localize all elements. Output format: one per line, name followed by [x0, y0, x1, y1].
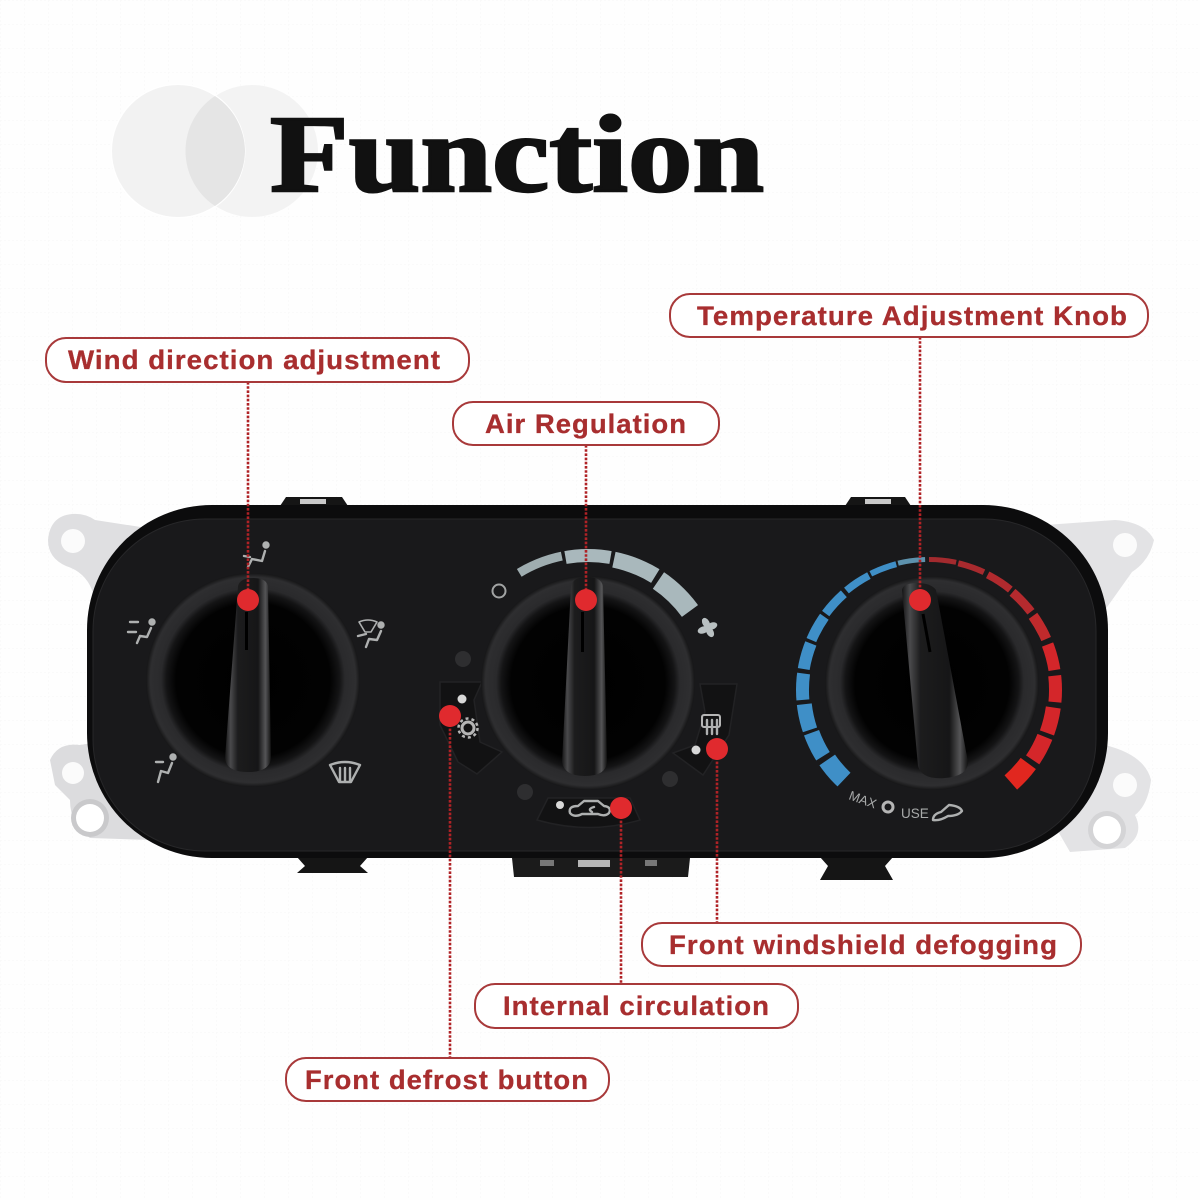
callout: wind direction adjustment: Wind direction adjustment [68, 345, 441, 375]
gauge caption: max use: MAX [847, 788, 879, 812]
button: rear windshield defogging [673, 684, 737, 775]
callout: air regulation [453, 402, 719, 611]
red hot segments [929, 556, 1062, 790]
product: AC control panel [48, 497, 1154, 880]
gauge: fan speed [517, 551, 698, 606]
bracket: top right [1045, 520, 1154, 610]
knob: air regulation [481, 576, 695, 790]
gauge caption: max use [847, 788, 962, 821]
blue cold segments [796, 556, 925, 787]
knob: temperature [825, 576, 1039, 790]
bracket: bottom left [50, 740, 170, 840]
callout: front defrost button: Front defrost button [305, 1065, 589, 1095]
title decoration: overlapping circles [110, 84, 318, 218]
gauge: temperature [796, 556, 1062, 790]
callout: internal circulation [475, 797, 798, 1028]
indicator dots [455, 651, 678, 800]
callout: air regulation: Air Regulation [485, 409, 687, 439]
callout: temperature adjustment knob [670, 294, 1148, 611]
knob: wind direction [146, 573, 360, 787]
bracket: bottom right [1040, 745, 1151, 852]
button: internal circulation [537, 798, 640, 828]
callout: front windshield defogging [642, 738, 1081, 966]
panel body [87, 505, 1108, 858]
button: front defrost [440, 682, 502, 774]
callout: front windshield defogging: Front windshield defogging [669, 930, 1058, 960]
title: Function [270, 93, 764, 215]
callout: wind direction adjustment [46, 338, 469, 611]
clips: top and bottom tabs [280, 497, 911, 880]
callout: temperature adjustment knob: Temperature Adjustment Knob [697, 301, 1128, 331]
callout: front defrost button [286, 705, 609, 1101]
icon: floor and vent seat [128, 620, 154, 643]
icon: defrost and seat [358, 620, 384, 647]
icon: windshield defrost [330, 762, 360, 782]
icon: floor seat [156, 754, 176, 782]
bracket: top left [48, 514, 160, 612]
icon: upper air vent seat [244, 542, 268, 567]
icon: off circle [492, 584, 506, 598]
gauge caption: max use: USE [901, 806, 929, 821]
icon: fan [697, 616, 718, 639]
callout: internal circulation: Internal circulation [503, 991, 770, 1021]
